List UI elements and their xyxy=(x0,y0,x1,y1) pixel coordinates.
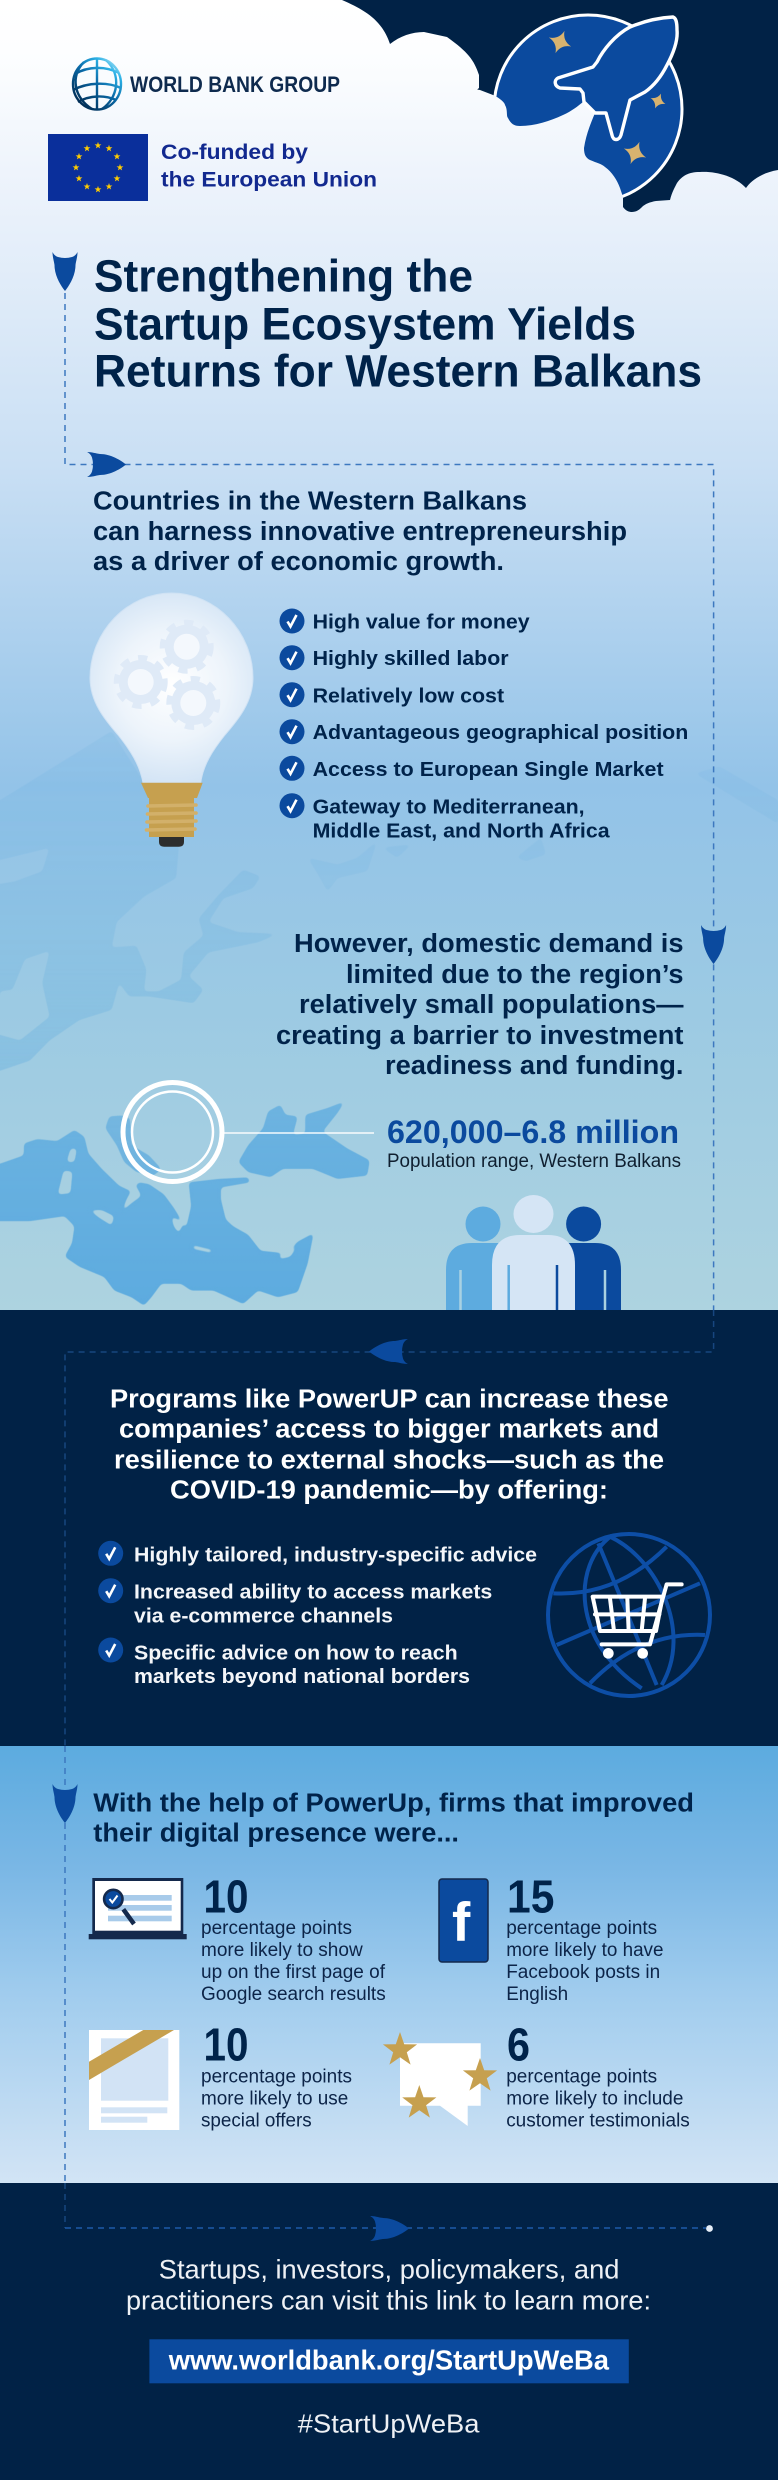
text block: domestic demand is limited: However, domestic demand is xyxy=(294,930,684,958)
icon: speech bubble with stars xyxy=(383,2032,497,2126)
stat: customer testimonials xyxy=(383,2019,690,2132)
offerings text: Specific advice on how to reach xyxy=(134,1642,458,1664)
title: Startup Ecosystem Yields xyxy=(94,298,636,349)
offerings text: Increased ability to access markets xyxy=(134,1582,492,1604)
stat: Facebook posts xyxy=(439,1870,664,2005)
title: Returns for Western Balkans xyxy=(94,346,702,397)
dashed path over light panel xyxy=(64,1746,66,2183)
dark sky behind the rocket xyxy=(330,0,778,215)
heading: programs like PowerUP: COVID-19 pandemic—by offering: xyxy=(170,1476,608,1504)
heading: programs like PowerUP: resilience to external shocks—such as the xyxy=(114,1446,664,1474)
stat: Facebook posts: 15 xyxy=(507,1870,554,1922)
icon: small rocket pointing right xyxy=(87,452,126,477)
text block: domestic demand is limited: relatively small populations— xyxy=(299,991,684,1019)
icon: rocket xyxy=(555,17,677,140)
population stat: Population range, Western Balkans xyxy=(387,1151,681,1172)
heading: programs like PowerUP: companies’ access to bigger markets and xyxy=(119,1416,659,1444)
stat: search results: Google search results xyxy=(201,1984,386,2005)
cloud xyxy=(300,60,778,240)
dashed path over footer xyxy=(65,2183,706,2228)
stat: search results: up on the first page of xyxy=(201,1962,386,1983)
heading: with the help of PowerUp: With the help of PowerUp, firms that improved xyxy=(93,1790,694,1818)
text block: domestic demand is limited xyxy=(276,930,684,1080)
check icon 6 xyxy=(280,793,304,818)
check icon 1 xyxy=(280,608,304,634)
stat: search results: 10 xyxy=(204,1870,248,1922)
stat: special offers: more likely to use xyxy=(201,2088,348,2109)
text block: domestic demand is limited: creating a barrier to investment xyxy=(276,1022,684,1050)
stat: Facebook posts: English xyxy=(506,1984,568,2005)
icon: laptop with magnifier xyxy=(89,1878,187,1939)
stat: customer testimonials: percentage points xyxy=(506,2066,657,2087)
check icon 4 xyxy=(280,719,304,744)
text: co-funded by the European Union: Co-funded by xyxy=(161,141,308,164)
subheading: harness innovative entrepreneurship xyxy=(93,487,627,576)
title: Strengthening the xyxy=(94,251,473,302)
dashed path connecting sections xyxy=(65,293,714,1310)
population stat: 620,000–6.8 million xyxy=(387,1114,679,1150)
checklist: reasons xyxy=(280,608,688,842)
link button xyxy=(149,2339,629,2383)
icon: Facebook phone: f xyxy=(452,1891,471,1953)
icon: globe with shopping cart xyxy=(548,1534,710,1696)
background: upper gradient panel xyxy=(0,0,778,1310)
check icon a xyxy=(98,1541,123,1566)
title xyxy=(94,251,702,397)
stat: Facebook posts: percentage points xyxy=(506,1918,657,1939)
icon: special offer page xyxy=(89,2030,179,2130)
offerings text: markets beyond national borders xyxy=(134,1666,470,1688)
icon: three people xyxy=(446,1195,621,1310)
icon: small rocket pointing down beside title xyxy=(52,252,78,291)
EU co-funding logo xyxy=(48,134,377,201)
end dot xyxy=(706,2225,713,2232)
subheading: harness innovative entrepreneurship: Countries in the Western Balkans xyxy=(93,487,527,515)
stat: special offers: special offers xyxy=(201,2111,312,2132)
call to action text: practitioners can visit this link to learn more: xyxy=(126,2285,651,2315)
icon: small rocket pointing left xyxy=(369,1339,408,1364)
checklist text: Access to European Single Market xyxy=(313,759,664,781)
icon: blue planet with stars xyxy=(494,15,682,203)
checklist: PowerUP offerings xyxy=(98,1541,537,1688)
stat: search results: percentage points xyxy=(201,1918,352,1939)
subheading: harness innovative entrepreneurship: as a driver of economic growth. xyxy=(93,548,504,576)
stat: customer testimonials: customer testimonials xyxy=(506,2111,690,2132)
stat: customer testimonials: more likely to include xyxy=(506,2088,683,2109)
check icon c xyxy=(98,1638,123,1662)
stat: Facebook posts: Facebook posts in xyxy=(506,1962,660,1983)
text: co-funded by the European Union: the European Union xyxy=(161,169,377,192)
text: co-funded by the European Union xyxy=(161,141,377,192)
population stat xyxy=(387,1114,681,1172)
dashed path over dark panel xyxy=(65,1310,714,1746)
stat: Facebook posts: more likely to have xyxy=(506,1940,664,1961)
stat: search results: more likely to show xyxy=(201,1940,363,1961)
offerings text: Highly tailored, industry-specific advice xyxy=(134,1545,537,1567)
icon: small rocket pointing down at right xyxy=(701,925,726,964)
icon: globe xyxy=(73,58,121,110)
stat: special offers: 10 xyxy=(204,2019,248,2071)
offerings text xyxy=(134,1545,537,1688)
text: World Bank Group: WORLD BANK GROUP xyxy=(130,72,340,97)
checklist text: High value for money xyxy=(313,611,531,633)
icon: Facebook phone xyxy=(439,1879,488,1962)
text block: domestic demand is limited: limited due to the region’s xyxy=(346,961,684,989)
checklist text: Advantageous geographical position xyxy=(313,722,688,744)
stat: search results xyxy=(89,1870,386,2005)
checklist text: Gateway to Mediterranean, xyxy=(313,796,585,818)
map of Europe and the Mediterranean xyxy=(0,733,370,1305)
icon: small rocket pointing down xyxy=(52,1784,78,1823)
subheading: harness innovative entrepreneurship: can harness innovative entrepreneurship xyxy=(93,518,627,546)
heading: with the help of PowerUp: their digital presence were... xyxy=(93,1820,459,1848)
heading: programs like PowerUP xyxy=(110,1385,668,1504)
check icon b xyxy=(98,1578,123,1603)
link button: www.worldbank.org/StartUpWeBa xyxy=(168,2344,609,2375)
checklist text: Relatively low cost xyxy=(313,685,504,707)
icon: EU flag xyxy=(48,134,148,201)
offerings text: via e-commerce channels xyxy=(134,1606,393,1628)
stat: customer testimonials: 6 xyxy=(507,2019,530,2071)
icon: small rocket pointing right in footer xyxy=(370,2216,409,2241)
call to action text xyxy=(126,2254,651,2315)
heading: with the help of PowerUp xyxy=(93,1790,694,1848)
hashtag: #StartUpWeBa xyxy=(298,2409,480,2439)
text block: domestic demand is limited: readiness and funding. xyxy=(385,1052,684,1080)
checklist text: Highly skilled labor xyxy=(313,648,509,670)
heading: programs like PowerUP: Programs like PowerUP can increase these xyxy=(110,1385,668,1413)
check icon 3 xyxy=(280,682,304,707)
panel: dark PowerUP section xyxy=(0,1310,778,1746)
stat: special offers: percentage points xyxy=(201,2066,352,2087)
panel: footer xyxy=(0,2183,778,2480)
panel: digital presence section xyxy=(0,1746,778,2183)
call to action text: Startups, investors, policymakers, and xyxy=(159,2254,619,2284)
check icon 5 xyxy=(280,756,304,781)
World Bank Group logo xyxy=(73,58,340,110)
check icon 2 xyxy=(280,645,304,670)
icon: light bulb with gears xyxy=(90,593,253,847)
map highlight ring on Western Balkans xyxy=(123,1082,374,1182)
checklist text xyxy=(313,611,688,842)
checklist text: Middle East, and North Africa xyxy=(313,820,611,842)
stat: special offers xyxy=(89,2019,352,2132)
